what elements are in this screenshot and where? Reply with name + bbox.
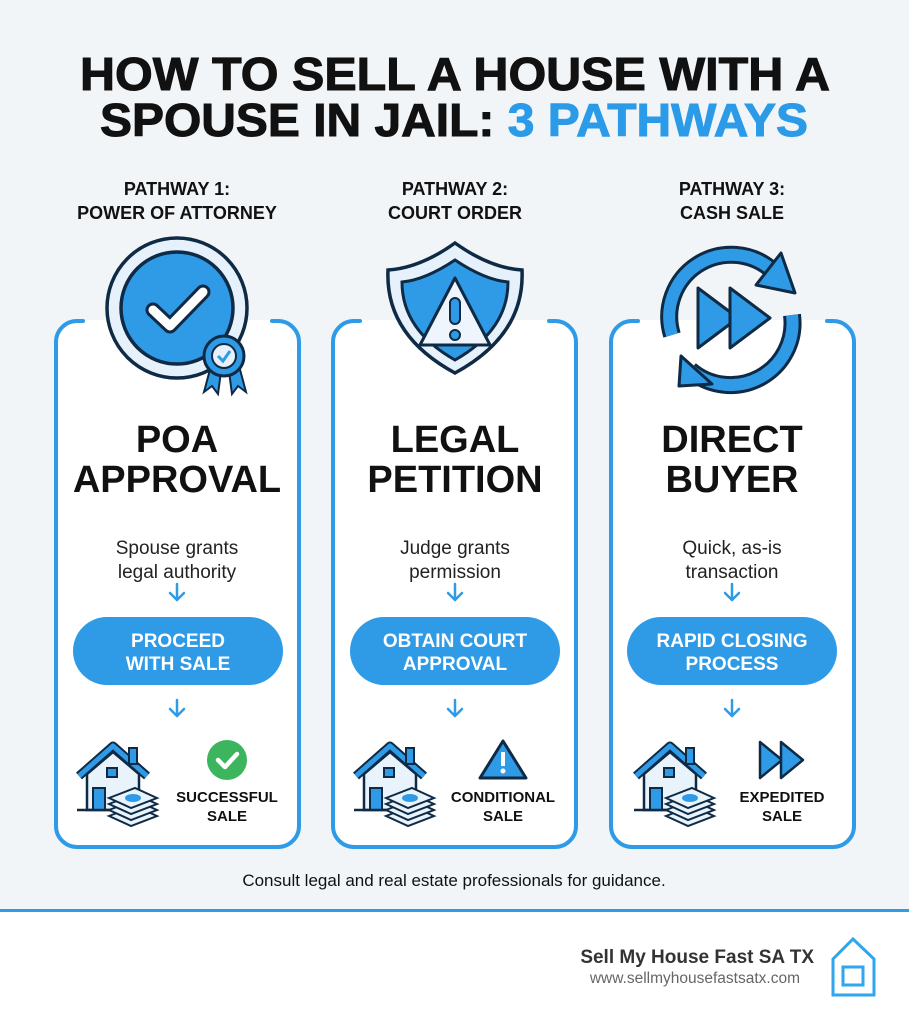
headings: DIRECT [661,419,803,461]
action pills: APPROVAL [403,654,507,675]
action pills: PROCESS [686,654,778,675]
headings: APPROVAL [73,459,281,501]
action pills: PROCEED [131,631,225,652]
descriptions: permission [409,562,501,583]
pathway labels: PATHWAY 1: [124,179,230,199]
headings [73,419,803,501]
title: SPOUSE IN JAIL: 3 PATHWAYS [100,94,808,146]
descriptions: transaction [686,562,778,583]
pathway labels: CASH SALE [680,203,784,223]
outcomes: SUCCESSFUL [176,789,278,806]
icon: check badge [107,238,247,394]
headings: LEGAL [391,419,519,461]
icon: green check [207,740,247,780]
pathway labels: PATHWAY 2: [402,179,508,199]
outcomes: SALE [483,808,523,825]
panel: pathway 1 card [55,320,300,848]
icon: cycle fast-forward [669,253,795,386]
outcomes: CONDITIONAL [451,789,555,806]
headings: POA [136,419,218,461]
title [80,48,830,146]
footer: Sell My House Fast SA TX [580,947,814,968]
action pills [73,617,837,685]
icon: fast forward [760,742,803,778]
panel: pathway 3 card [610,320,855,848]
action pills: WITH SALE [126,654,230,675]
pathway labels: PATHWAY 3: [679,179,785,199]
outcomes [176,789,825,825]
arrows down [170,584,739,716]
descriptions: Judge grants [400,538,510,559]
outcomes: SALE [762,808,802,825]
headings: PETITION [367,459,543,501]
title: HOW TO SELL A HOUSE WITH A [80,48,830,100]
pathway labels [77,179,785,223]
pathway labels: COURT ORDER [388,203,522,223]
pathway labels: POWER OF ATTORNEY [77,203,277,223]
descriptions: Spouse grants [116,538,238,559]
action pills: RAPID CLOSING [657,631,807,652]
footer: www.sellmyhousefastsatx.com [589,970,800,987]
footer [0,909,909,1024]
descriptions [116,538,782,583]
panel: pathway 2 card [332,320,577,848]
icon: shield warning [388,243,522,373]
footnote: Consult legal and real estate professionals for guidance. [242,871,666,890]
icon: warning triangle [480,741,526,778]
action pills: OBTAIN COURT [383,631,528,652]
outcomes: SALE [207,808,247,825]
headings: BUYER [665,459,799,501]
descriptions: Quick, as-is [682,538,782,559]
icon: house and money [77,746,714,826]
descriptions: legal authority [118,562,237,583]
icon: logo house [833,939,874,995]
outcomes: EXPEDITED [739,789,825,806]
